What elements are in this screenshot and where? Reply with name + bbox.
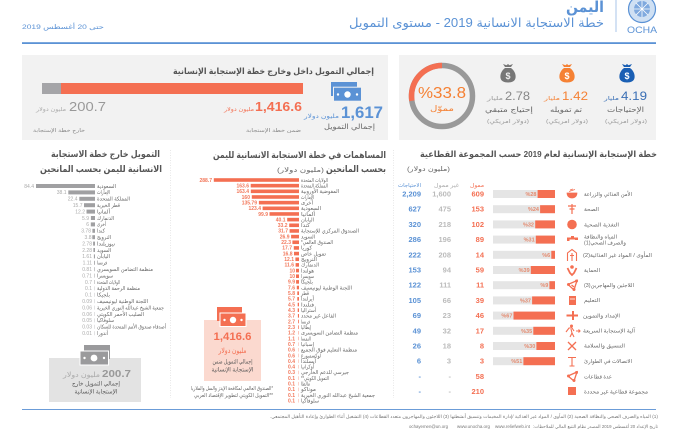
bar chart: donors outside plan: 84.4	[24, 184, 34, 190]
row: refugees and migrants: 111	[439, 281, 451, 290]
card: funding inside plan: الإستجابة الإنسانية	[212, 366, 254, 374]
row: education: 66	[443, 296, 451, 305]
bar chart: donors inside plan: المملكة المتحدة	[301, 182, 328, 189]
bar chart: donors inside plan: 7.6	[288, 285, 295, 291]
panel: requirements and funding	[399, 55, 656, 140]
row: logistics	[413, 311, 620, 320]
unit note: (مليون دولار)	[407, 166, 450, 173]
bar chart: donors inside plan: 16.8	[283, 251, 293, 257]
row: rapid response: %35	[521, 329, 532, 335]
bar chart: donors inside plan: الفاعل غير محدد	[301, 314, 336, 320]
card: funding inside plan: 1,416.6	[214, 331, 252, 343]
bar chart: donors outside plan: 15.7	[73, 203, 83, 209]
donut chart: funded share: %33.8	[418, 85, 466, 102]
funding inside plan: مليون دولار	[223, 107, 254, 113]
row: coordination and safety: 8	[480, 342, 484, 350]
bar chart: donors inside plan: الدنمارك	[301, 263, 319, 269]
row: protection: %39	[519, 268, 530, 274]
row: health: الصحة	[584, 207, 599, 213]
funding outside plan: 200.7	[69, 99, 106, 114]
stat: requirements: مليار	[603, 96, 619, 102]
bar chart: donors inside plan: 40.1	[276, 217, 286, 223]
stat: remaining requirement: (دولار امريكي)	[487, 118, 529, 125]
bar chart: donors inside plan: فرنسا	[301, 319, 310, 325]
column headers: غير ممول	[434, 183, 459, 189]
total funding: إجمالي التمويل	[324, 124, 375, 131]
row: shelter: 208	[438, 250, 451, 259]
total funding: 1,617	[341, 104, 383, 122]
card: funding outside plan: مليون دولار	[62, 372, 100, 379]
row: logistics: 46	[476, 311, 484, 320]
row: refugees and migrants: %9	[540, 283, 548, 289]
icon: banknotes grey	[80, 345, 110, 365]
row: rapid response: 17	[476, 326, 484, 335]
bar chart: donors inside plan: 160	[242, 195, 250, 201]
row: water and sanitation: %31	[524, 238, 535, 244]
bar chart: donors outside plan: ألمانيا	[97, 207, 110, 215]
source line	[409, 423, 659, 430]
bar chart: donors outside plan: جمعية الشيخ عبدالله النوري الخيرية	[97, 305, 164, 311]
stacked funding bar	[42, 83, 303, 94]
bar chart: donors inside plan: إسبانيا	[301, 342, 314, 348]
bar chart: donors inside plan: 10	[289, 274, 295, 280]
row: logistics: 23	[443, 311, 451, 320]
bar chart: donors inside plan: اليابان	[301, 217, 314, 223]
row: water and sanitation	[408, 234, 626, 246]
panel: total funding inside and outside the plan	[22, 55, 388, 140]
section heading: المساهمات في خطة الاستجابة الانسانية لليمن	[213, 150, 386, 161]
row: education: 105	[408, 296, 421, 305]
row: water and sanitation: المياه والنظافة	[584, 234, 617, 240]
bar chart: donors inside plan: 33.2	[278, 223, 288, 229]
bar chart: donors inside plan: منظمة التضامن السويسرى	[301, 331, 358, 337]
bar chart: donors inside plan: 0.6	[288, 348, 295, 354]
bar chart: donors inside plan: الإمارات	[301, 195, 314, 201]
bar chart: donors inside plan: 123.4	[248, 206, 261, 212]
row: emergency telecommunications: %51	[511, 359, 522, 365]
bar chart: donors inside plan: 0.1	[288, 382, 295, 388]
row: food security	[402, 189, 632, 198]
row: emergency telecommunications: 3	[480, 357, 484, 366]
bar chart: donors inside plan: 4.5	[288, 302, 295, 308]
section heading: بحسب المانحين	[326, 164, 386, 175]
funding inside plan	[223, 99, 302, 134]
stat: remaining requirement: مليار	[486, 96, 503, 102]
bar chart: donors outside plan: 5.9	[82, 216, 89, 222]
bar chart: donors inside plan: الصندوق العالمي*	[301, 240, 333, 246]
row: emergency telecommunications	[417, 357, 632, 366]
bar chart: donors inside plan: الولايات المتحدة	[301, 178, 328, 184]
footnotes: donors	[191, 385, 274, 399]
bar chart: donors inside plan: تمويل خاص	[301, 251, 326, 257]
bar chart: donors inside plan: 0.6	[288, 353, 295, 359]
row: coordination and safety: 18	[443, 342, 451, 350]
bar chart: donors outside plan: 0.1	[85, 293, 92, 299]
row: health: 153	[471, 205, 484, 214]
bar chart: donors outside plan: 1.11	[83, 261, 92, 267]
row: health: 475	[438, 205, 451, 214]
bar chart: donors outside plan: 0.03	[82, 325, 92, 331]
row: nutrition: 102	[471, 220, 484, 229]
bar chart: donors inside plan: لوكسمبورغ	[301, 352, 321, 359]
bar chart: donors inside plan: جمعية الشيخ عبدالله النوري الخيرية	[301, 393, 375, 399]
row: shelter	[408, 250, 652, 261]
bar chart: donors inside plan: ألمانيا	[301, 210, 315, 218]
bar chart: donors outside plan: اليابان	[97, 254, 110, 260]
bar chart: donors inside plan: 11.6	[285, 263, 294, 269]
bar chart: donors outside plan: 38.1	[57, 190, 67, 196]
section heading: الانسانية لليمن بحسب المانحين	[40, 164, 162, 175]
bar chart: donors inside plan: 31.7	[278, 229, 288, 235]
bar chart: donors inside plan: بلجيكا	[301, 279, 313, 286]
bar chart: donors outside plan: السعودية	[97, 184, 116, 190]
row: rapid response: آلية الإستجابة السريعة	[583, 328, 635, 334]
row: refugees and migrants	[408, 280, 634, 291]
bar chart: donors inside plan: 99.9	[258, 212, 268, 218]
row: multi-sector: -	[448, 372, 452, 381]
funding inside plan: ضمن خطة الإستجابة	[246, 128, 301, 134]
row: coordination and safety: %30	[524, 344, 535, 350]
source line: ochayemen@un.org	[409, 424, 448, 429]
funding inside plan: 1,416.6	[255, 99, 302, 114]
row: food security: 1,600	[432, 190, 451, 198]
row: emergency telecommunications: الاتصالات في الطوارئ	[584, 359, 632, 365]
bar chart: donors outside plan	[24, 184, 166, 337]
header	[22, 0, 658, 44]
row: protection	[408, 265, 600, 275]
bar chart: donors outside plan: نيوزيلندا	[97, 241, 115, 247]
stat: funded: تم تمويله	[550, 107, 582, 114]
bar chart: donors outside plan: 0.71	[82, 273, 92, 279]
bar chart: donors inside plan: 135.79	[242, 200, 257, 206]
bar chart: donors inside plan: 5.7	[288, 297, 295, 303]
row: education: %37	[520, 298, 531, 304]
row: multi-sector	[418, 371, 612, 382]
row: logistics: الإمداد والتموين	[583, 314, 620, 320]
bar chart: donors outside plan: قطر الخيرية	[97, 203, 120, 209]
row: water and sanitation: 286	[408, 235, 421, 244]
bar chart: donors inside plan: الصندوق المركزي للإستجابة	[301, 228, 359, 235]
row: food security: 2,209	[402, 190, 421, 198]
row: nutrition: 218	[438, 220, 451, 229]
bar chart: donors inside plan: كندا	[301, 222, 310, 229]
subtitle: خطة الاستجابة الانسانية 2019 - مستوى التمويل	[349, 16, 604, 31]
row: coordination and safety: التنسيق والسلامة	[584, 344, 625, 350]
logo: OCHA	[627, 0, 658, 36]
row: multi-sector: 58	[476, 372, 484, 381]
bar chart: donors outside plan: أندورا	[97, 329, 108, 337]
row: coordination and safety	[413, 342, 625, 350]
column headers: ممول	[470, 183, 484, 189]
bar chart: donors outside plan: أخرى	[97, 220, 106, 228]
row: water and sanitation: 196	[438, 235, 451, 244]
bar chart: donors inside plan: التمويل الكويتي**	[301, 375, 329, 382]
row: unspecified sector: -	[418, 387, 422, 396]
bar chart: donors inside plan: 0.3	[288, 370, 295, 376]
card: funding outside plan: إجمالي التمويل خارج	[72, 380, 120, 388]
stat: funded: مليار	[543, 96, 560, 102]
column headers	[398, 183, 484, 189]
bar chart: donors outside plan: 0.06	[82, 305, 92, 311]
icon: banknotes orange	[217, 307, 246, 326]
bar chart: donors outside plan: النرويج	[97, 235, 111, 241]
bar chart: donors outside plan: منظمة التضامن السويسري	[97, 267, 153, 273]
source line: تاريخ الإعداد 20 أغسطس 2019 المصدر نظام التتبع المالي للملاحظات:	[533, 423, 659, 430]
bar chart: donors inside plan: هولندا	[301, 268, 314, 274]
bar chart: donors outside plan: 0.1	[85, 286, 92, 292]
bar chart: donors inside plan: اللجنة الوطنية ليونيسيف	[301, 285, 352, 291]
row: emergency telecommunications: 3	[447, 357, 451, 366]
bar chart: donors inside plan: 0.7	[288, 342, 295, 348]
row: unspecified sector: 210	[471, 387, 484, 396]
row: water and sanitation: والصرف الصحي(1)	[584, 240, 626, 246]
stat: requirements: الإحتياجات	[607, 107, 644, 114]
bar chart: donors outside plan: 1.61	[82, 254, 92, 260]
bar chart: donors inside plan: 1.2	[288, 331, 295, 337]
bar chart: donors outside plan: أصدقاء صندوق الأمم المتحدة للسكان	[97, 323, 166, 331]
stat: funded: 1.42	[562, 91, 588, 103]
panel heading: إجمالي التمويل داخل وخارج خطة الإستجابة الإنسانية	[173, 66, 374, 77]
stat: funded: (دولار امريكي)	[546, 118, 588, 125]
bar chart: donors outside plan: 0.01	[82, 331, 92, 337]
footer	[22, 409, 659, 430]
row: shelter: 222	[408, 250, 421, 259]
bar chart: donors outside plan: 2.78	[82, 241, 92, 247]
bar chart: donors outside plan: 12.2	[75, 209, 85, 215]
bar chart: donors outside plan: اللجنة الوطنية ليونيسيف	[97, 299, 148, 305]
bar chart: donors inside plan: 0.4	[288, 365, 295, 371]
stat: requirements: 4.19	[621, 91, 647, 103]
bar chart: donors inside plan: أوكرانيا	[301, 363, 314, 371]
bar chart: donors outside plan: 0.06	[82, 312, 92, 318]
bar chart: donors inside plan: أيسلندا	[301, 357, 316, 365]
panel: contributions to the plan by donor	[191, 150, 386, 405]
bar chart: donors inside plan: أخرى	[301, 198, 313, 206]
stat: funded	[543, 64, 588, 125]
row: protection: الحماية	[584, 268, 600, 274]
bar chart: donors outside plan: سويسرا	[97, 273, 113, 279]
column headers: الاحتياجات	[398, 183, 421, 189]
bar chart: donors inside plan: سويسرا	[301, 274, 314, 280]
row: nutrition: %32	[523, 222, 534, 228]
bar chart: donors inside plan: السعودية	[301, 206, 321, 212]
bar chart: donors outside plan: 0.09	[82, 299, 92, 305]
bar chart: donors inside plan: 0.1	[288, 399, 295, 405]
row: shelter: %6	[542, 253, 550, 259]
bar chart: donors inside plan: 0.1	[288, 387, 295, 393]
bar chart: donors outside plan: الصليب الأحمر الكويتي	[97, 310, 144, 318]
row: rapid response: 32	[443, 326, 451, 335]
row: refugees and migrants: اللاجئين والمهاجرين(3)	[584, 283, 634, 289]
row: protection: 59	[476, 266, 484, 274]
row: refugees and migrants: 11	[476, 281, 484, 290]
bar chart: donors inside plan: قطر	[300, 291, 309, 297]
bar chart: donors outside plan: 3.78	[81, 229, 91, 235]
bar chart: donors outside plan: الدنمارك	[97, 216, 114, 222]
stat: remaining requirement	[485, 64, 533, 125]
row: health	[408, 204, 599, 214]
row: health: 627	[408, 205, 421, 214]
source line: www.unocha.org	[457, 424, 490, 429]
bar chart: donors inside plan: كوريا	[301, 245, 312, 252]
row: water and sanitation: 89	[476, 235, 484, 244]
icon: money bag blue: $	[624, 71, 630, 81]
bar chart: donors outside plan: 0.7	[85, 280, 92, 286]
bar chart: donors inside plan: 163.4	[236, 189, 249, 195]
bar chart: donors inside plan: 1.1	[288, 336, 295, 342]
icon: money bag grey: $	[505, 71, 511, 81]
stat: requirements: (دولار امريكي)	[605, 118, 647, 125]
total funding: مليون دولار	[303, 113, 339, 120]
card: funding inside plan: إجمالي التمويل ضمن	[212, 358, 253, 366]
section heading	[213, 150, 386, 175]
row: food security: الأمن الغذائي والزراعة	[584, 190, 632, 198]
row: unspecified sector: -	[448, 387, 452, 396]
row: rapid response: 49	[413, 326, 421, 335]
panel: funding outside plan by donor	[24, 149, 166, 402]
bar chart: donors inside plan: 3.7	[288, 314, 295, 320]
card: funding outside plan	[49, 345, 141, 402]
bar chart: donors outside plan: منظمة الرحمة الدولية	[97, 286, 140, 292]
bar chart: donors inside plan: 4.3	[288, 308, 295, 314]
funding outside plan: مليون دولار	[35, 107, 66, 113]
row: nutrition: التغذية الصحية	[584, 222, 620, 228]
row: refugees and migrants: 122	[408, 281, 421, 290]
card: funding outside plan: الإستجابة الإنسانية	[74, 388, 118, 396]
row: shelter: 14	[476, 250, 485, 259]
bar chart: donors outside plan: السويد	[97, 248, 111, 254]
bar chart: donors inside plan: النمسا	[301, 336, 311, 342]
bar chart: donors outside plan: 6	[86, 222, 89, 228]
source line: www.reliefweb.int	[495, 424, 531, 429]
bar chart: donors inside plan: 0.1	[288, 393, 295, 399]
bar chart: donors inside plan: 22.3	[281, 240, 291, 246]
bar chart: donors inside plan: أيرلندا	[301, 295, 314, 303]
row: education: التعليم	[584, 298, 600, 304]
bar chart: donors inside plan: مالطا	[301, 382, 310, 388]
card: funding inside plan	[204, 307, 261, 381]
row: nutrition	[408, 220, 620, 229]
bar chart: donors inside plan: 288.7	[199, 178, 212, 184]
bar chart: donors outside plan: الولايات المتحدة	[97, 280, 120, 286]
date: حتى 20 أغسطس 2019	[22, 22, 104, 31]
row: nutrition: 320	[408, 220, 421, 229]
bar chart: donors inside plan: 0.4	[288, 359, 295, 365]
bar chart: donors outside plan: كندا	[97, 228, 105, 235]
bar chart: donors inside plan: 17.7	[282, 246, 292, 252]
donut chart: funded share: مموّل	[430, 104, 454, 113]
bar chart: donors inside plan: 10	[289, 268, 295, 274]
section heading: التمويل خارج خطة الاستجابة	[51, 149, 160, 160]
bar chart: donors inside plan: منظمة التعليم فوق الجميع	[301, 348, 357, 354]
row: education: 39	[476, 296, 484, 305]
bar chart: donors inside plan: 12.1	[284, 257, 294, 263]
row: food security: 609	[471, 190, 484, 198]
stat: remaining requirement: إحتياج متبقي	[485, 107, 533, 114]
bar chart: donors inside plan: فنلندا	[301, 302, 314, 308]
bar chart: donors inside plan: 5.8	[288, 291, 295, 297]
card: funding inside plan: مليون دولار	[218, 346, 246, 355]
icon: money bag orange: $	[564, 71, 570, 81]
row: coordination and safety: 26	[413, 342, 421, 350]
bar chart: donors inside plan: المفوضية الأوروبية	[301, 187, 339, 195]
bar chart: donors outside plan: المملكة المتحدة	[97, 196, 130, 203]
funding outside plan: خارج خطة الإستجابة	[33, 128, 85, 134]
stat: remaining requirement: 2.78	[505, 91, 530, 103]
bar chart: donors inside plan: 2.3	[288, 325, 295, 331]
row: health: %24	[528, 207, 540, 213]
row: multi-sector: عدة قطاعات	[584, 374, 612, 380]
bar chart: donors inside plan: النرويج	[301, 257, 317, 263]
bar chart: donors outside plan: 3.8	[85, 235, 92, 241]
bar chart: donors outside plan: 0.05	[82, 318, 92, 324]
row: protection: 94	[443, 266, 452, 274]
donut chart: funded share	[412, 66, 472, 126]
card: funding outside plan: 200.7	[102, 368, 131, 380]
row: protection: 153	[408, 266, 421, 274]
footnotes: donors: **التمويل الكويتي لتطوير الإقتصاد العربي	[194, 392, 274, 399]
icon: banknotes blue	[331, 82, 362, 101]
bar chart: donors inside plan	[199, 178, 375, 405]
stat: requirements	[603, 64, 647, 125]
row: education	[408, 296, 600, 305]
row: food security: %28	[525, 192, 536, 198]
bar chart: donors inside plan: 0.1	[288, 376, 295, 382]
row: emergency telecommunications: 6	[417, 357, 421, 366]
footnotes: sectors: (1) المياه والصرف الصحي والنظافة الصحية (2) المأوى / المواد غير الغذائية /إدارة المخيمات وتنسيق أنشطتها (3) اللاجئون والمهاجرون متعدد القطاعات (4) التشغيل أثناء الطوارئ وإعادة التأهيل المجتمعي.	[270, 413, 658, 420]
bar chart: donors inside plan: جيرسي للدعم الخارجي	[301, 370, 349, 376]
bar chart: donors inside plan: 163.6	[236, 183, 249, 189]
logo: OCHA: OCHA	[627, 25, 658, 36]
bar chart: donors inside plan: السويد	[301, 234, 315, 240]
bar chart: donors outside plan: سلوفاكيا	[97, 317, 114, 324]
row: unspecified sector: مجموعة قطاعية غير محددة	[584, 390, 648, 396]
section heading	[40, 149, 162, 175]
row: unspecified sector	[418, 387, 648, 396]
bar chart: donors inside plan: سلوفاكيا	[301, 398, 319, 405]
total funding	[303, 104, 383, 131]
row: logistics: 69	[413, 311, 421, 320]
row: logistics: %67	[501, 314, 512, 320]
bar chart: donors inside plan: موناكو	[300, 386, 316, 393]
section heading: خطة الإستجابة الإنسانية لعام 2019 حسب المجموعة القطاعية	[420, 149, 657, 160]
bar chart: donors outside plan: بلجيكا	[97, 292, 110, 299]
bar chart: donors outside plan: الإمارات	[97, 190, 110, 196]
bar chart: donors outside plan: 0.81	[82, 267, 92, 273]
funding outside plan	[33, 99, 106, 134]
bar chart: donors outside plan: 22.4	[68, 197, 78, 203]
row: shelter: المأوى / المواد غير الغذائية(2)	[583, 251, 652, 259]
bar chart: donors inside plan: 26.9	[280, 234, 290, 240]
bar chart: donors outside plan: 2.28	[82, 248, 92, 254]
section heading: (مليون دولار)	[277, 167, 324, 174]
bar chart: donors inside plan: إيطاليا	[301, 325, 311, 331]
panel: sector funding	[398, 149, 657, 396]
row: multi-sector: -	[418, 372, 422, 381]
footnotes: donors: *الصندوق العالمي لمكافحة الإيدز والسل والملاريا	[191, 385, 274, 392]
row: rapid response	[413, 324, 635, 337]
bar chart: donors inside plan: 9.9	[288, 280, 295, 286]
bar chart: donors inside plan: أستراليا	[301, 306, 316, 314]
bar chart: donors inside plan: 2.7	[288, 319, 295, 325]
bar chart: donors outside plan: فرنسا	[97, 261, 107, 267]
